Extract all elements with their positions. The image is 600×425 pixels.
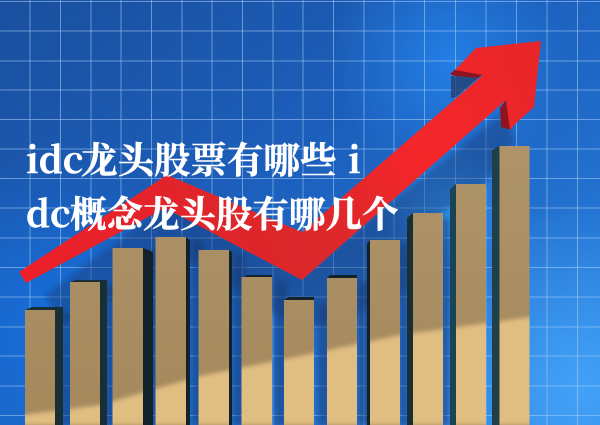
shadow under arrow barb xyxy=(451,76,478,98)
arrowhead dark sides xyxy=(450,69,483,78)
bar shadows on the wall xyxy=(60,218,449,425)
title line 1: 龙头股票有哪些 xyxy=(81,140,336,181)
title line 1: i xyxy=(348,132,361,184)
arrow shadow on the wall xyxy=(45,115,515,330)
title line 2: dc xyxy=(26,186,71,238)
title line 1: idc xyxy=(26,132,83,184)
bar front faces xyxy=(25,146,530,425)
bar side faces xyxy=(25,146,500,425)
red trend arrow xyxy=(19,41,541,283)
title text xyxy=(26,132,398,238)
bar chart xyxy=(25,146,530,425)
lit lower band xyxy=(25,315,530,425)
arrow body xyxy=(19,41,541,283)
title line 2: 概念龙头股有哪几个 xyxy=(70,194,398,235)
